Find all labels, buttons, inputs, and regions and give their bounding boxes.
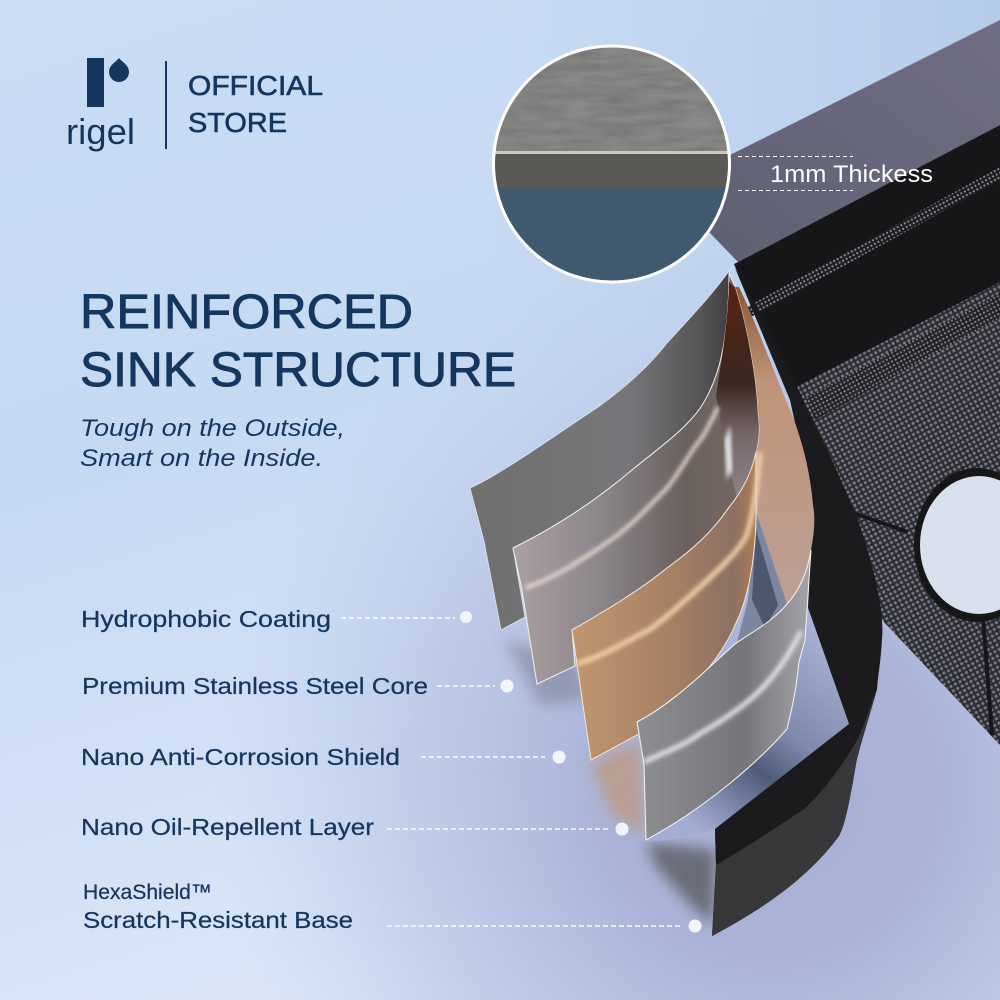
title: SINK STRUCTURE <box>80 344 516 397</box>
tagline: Smart on the Inside. <box>80 445 323 472</box>
layer 5 fold <box>715 675 877 865</box>
bright mesh strip <box>806 293 1000 420</box>
black outer layer <box>712 268 882 936</box>
layer 3 highlight <box>577 452 760 664</box>
sink rim <box>690 20 1000 262</box>
layer 2 dark inner fold <box>716 282 759 498</box>
label: oil-repellent layer: Nano Oil-Repellent Layer <box>81 814 374 840</box>
logo mark bar <box>87 58 104 107</box>
tagline: Tough on the Outside, <box>80 415 345 442</box>
sink corner <box>690 20 1000 745</box>
layer 2 highlight <box>525 407 718 588</box>
label: hydrophobic coating: Hydrophobic Coating <box>81 606 331 632</box>
layer 4: oil repellent steel <box>637 550 811 840</box>
title: REINFORCED <box>80 286 413 339</box>
layered material fan <box>470 267 882 936</box>
layer 5: black hexashield base <box>712 689 877 936</box>
drain hole <box>914 468 1000 622</box>
label: scratch-resistant base <box>83 881 702 933</box>
label: hydrophobic coating <box>81 606 472 632</box>
title <box>80 286 516 397</box>
floor shadows <box>505 640 716 925</box>
label: anti-corrosion shield <box>81 744 566 770</box>
logo divider <box>165 61 167 149</box>
blue inner floor <box>646 600 849 842</box>
blue gap wedge <box>735 512 787 650</box>
tagline <box>80 415 345 472</box>
store label: OFFICIAL <box>188 70 323 101</box>
layer 2 mirror glint <box>725 425 732 480</box>
thickness callout <box>738 156 933 190</box>
store label: STORE <box>188 107 287 138</box>
copper back wall <box>735 287 814 640</box>
logo mark drop <box>109 58 129 82</box>
label: stainless steel core: Premium Stainless Steel Core <box>82 673 428 699</box>
store label <box>188 70 323 138</box>
logo <box>66 58 135 152</box>
layer 1: gray coating <box>470 267 732 630</box>
label: scratch-resistant base: Scratch-Resistant Base <box>83 907 353 933</box>
upper mesh strip <box>747 167 1000 318</box>
layer 4 highlight <box>644 631 801 762</box>
logo wordmark: rigel <box>66 111 135 152</box>
sink floor mesh <box>790 282 1000 745</box>
drain grooves <box>856 514 992 735</box>
magnifier lens <box>490 40 735 287</box>
label: anti-corrosion shield: Nano Anti-Corrosion Shield <box>81 744 400 770</box>
sink black body <box>734 125 1000 745</box>
thickness callout: 1mm Thickess <box>770 161 933 188</box>
label: oil-repellent layer <box>81 814 628 840</box>
layer 3: copper shield <box>572 452 756 760</box>
label: scratch-resistant base: HexaShield™ <box>83 881 212 904</box>
layer 2: stainless steel <box>513 273 759 684</box>
